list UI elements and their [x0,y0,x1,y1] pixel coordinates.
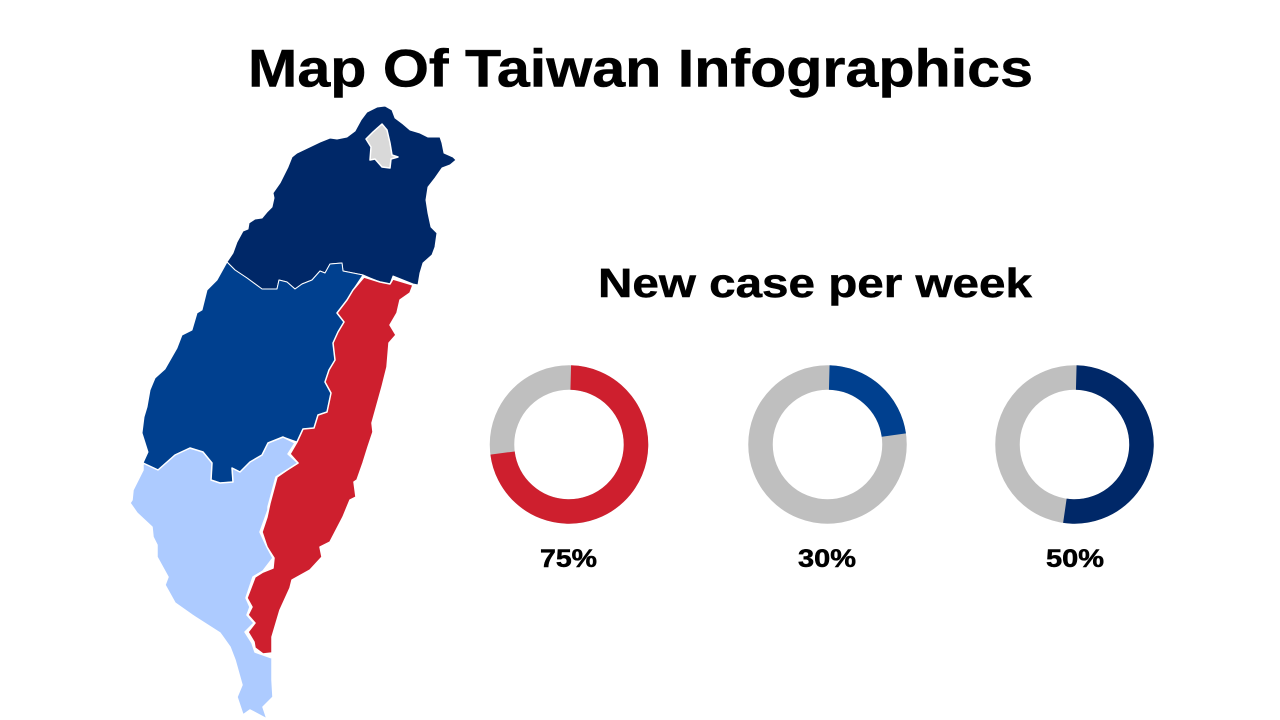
title: Map Of Taiwan Infographics [248,40,1033,98]
region: east [247,277,413,654]
map of Taiwan [130,106,456,719]
region: central [142,262,363,483]
region: north [227,106,456,289]
region: Taipei [366,124,398,168]
donut chart: 50% [1006,376,1143,513]
donut chart: 75% [500,376,638,513]
donut chart: 30% [759,376,896,513]
subheading: New case per week [598,260,1032,306]
label: 30%: 30% [798,545,856,573]
label: 50%: 50% [1046,545,1104,573]
label: 75%: 75% [540,545,597,573]
region: south [130,437,298,719]
